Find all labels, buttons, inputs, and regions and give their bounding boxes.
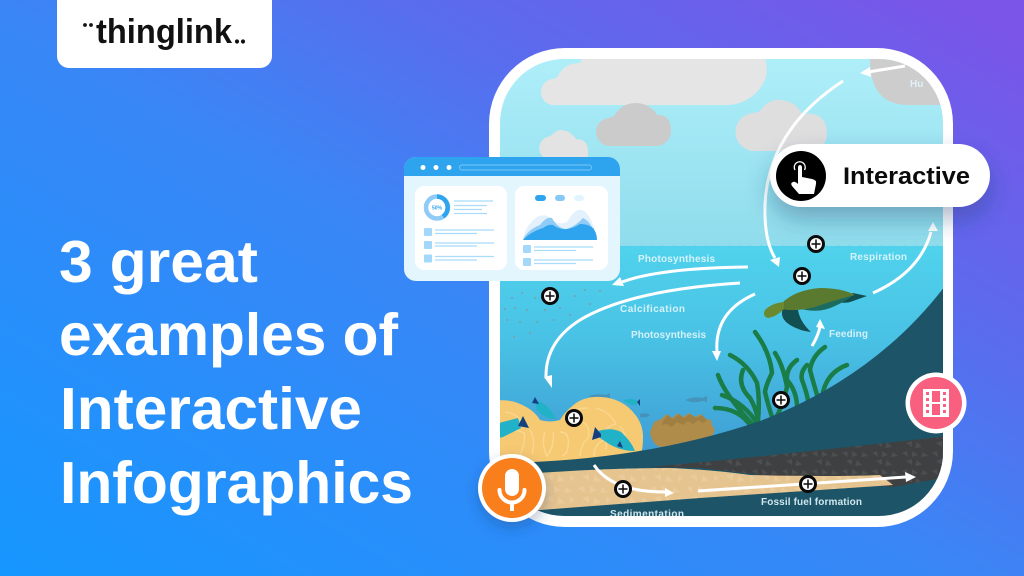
arrow: respiration	[873, 222, 938, 293]
right card	[515, 186, 608, 270]
logo card	[57, 0, 272, 68]
arrow: calcification	[544, 283, 740, 388]
arrow: feeding	[812, 319, 825, 346]
card white frame	[489, 48, 953, 527]
scene labels: Sedimentation	[610, 509, 684, 520]
cloud: right	[735, 100, 827, 151]
arrow: top right	[860, 66, 905, 77]
turtle	[764, 288, 867, 332]
icon: microphone badge	[478, 454, 546, 522]
scene labels: Photosynthesis	[638, 254, 715, 265]
fish: left	[500, 418, 521, 438]
scene labels: Calcification	[620, 304, 685, 315]
scene labels: Respiration	[850, 252, 907, 263]
cloud: large top	[541, 57, 767, 105]
scene labels: Fossil fuel formation	[761, 497, 862, 508]
sand sediment layer	[538, 468, 893, 510]
coral: brain coral	[500, 396, 643, 462]
background fish silhouettes	[588, 393, 707, 417]
label: Humidity (cropped): Hu	[910, 79, 923, 90]
window body	[404, 157, 620, 281]
title: examples of	[59, 302, 398, 368]
title	[59, 229, 413, 516]
area chart	[523, 210, 597, 240]
scene	[495, 57, 950, 520]
fish	[495, 397, 640, 451]
seaweed	[715, 332, 847, 428]
pill label: Interactive	[843, 163, 970, 190]
sky	[500, 59, 943, 249]
right card lines	[523, 245, 593, 266]
cloud: small left	[539, 130, 588, 160]
plankton dots	[504, 289, 601, 338]
left card	[415, 186, 507, 270]
seabed	[534, 288, 943, 516]
icon: film badge	[906, 372, 966, 434]
charcoal sediment layer	[650, 436, 948, 487]
donut chart: 50%	[432, 206, 443, 212]
coral: brown sponge	[650, 413, 715, 448]
arrow: sedimentation	[594, 465, 674, 497]
fish: top	[536, 400, 556, 419]
title: Interactive	[60, 376, 362, 442]
scene labels: Photosynthesis	[631, 330, 706, 341]
title: Infographics	[60, 450, 413, 516]
arrow: photosynthesis lower	[712, 294, 755, 361]
logo dots right	[235, 39, 245, 44]
arrow: fossil fuel	[698, 472, 916, 491]
hotspot markers	[541, 235, 825, 498]
arrow: photosynthesis top	[612, 267, 748, 286]
title: 3 great	[59, 229, 258, 295]
fish: small	[623, 399, 637, 405]
arrow: long descending	[765, 81, 843, 267]
panel: browser dashboard window	[404, 157, 620, 281]
left card lines	[424, 201, 494, 262]
sea	[500, 246, 943, 476]
legend pills	[535, 195, 584, 201]
cloud: top right	[870, 59, 940, 105]
window dots	[420, 165, 452, 170]
window header	[404, 157, 620, 176]
cloud: mid grey	[596, 103, 671, 146]
icon: tap hand	[776, 151, 826, 201]
panel: ocean carbon cycle card	[489, 48, 953, 527]
logo dots left	[83, 23, 93, 27]
fish: lower right	[598, 429, 635, 451]
address bar	[460, 165, 592, 170]
interactive pill	[770, 144, 990, 207]
logo wordmark: thinglink	[96, 13, 232, 51]
scene labels	[610, 252, 907, 520]
scene labels: Feeding	[829, 329, 868, 340]
